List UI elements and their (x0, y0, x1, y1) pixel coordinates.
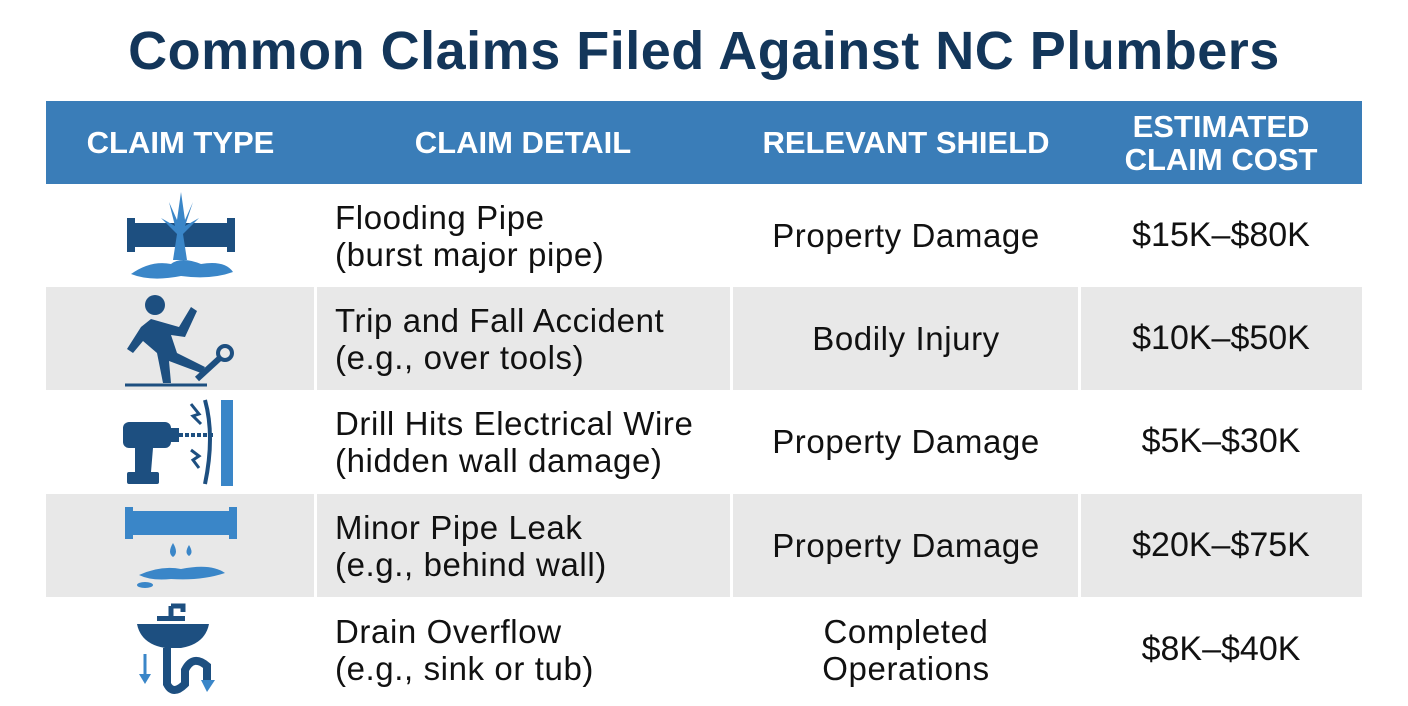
icon: burst pipe (127, 192, 235, 279)
text: leak detail: (e.g., behind wall) (335, 546, 607, 582)
row: flooding pipe (127, 192, 1310, 279)
text: shield: Property Damage (772, 217, 1040, 254)
text: drill detail (335, 404, 693, 479)
header: claim detail: CLAIM DETAIL (415, 125, 631, 160)
icon: leaking pipe (125, 507, 237, 588)
text: cost: $5K–$30K (1142, 422, 1300, 460)
text: cost: $15K–$80K (1132, 216, 1310, 254)
text: trip detail (335, 302, 664, 376)
text: shield: Bodily Injury (812, 320, 1000, 357)
text: leak detail (335, 508, 607, 583)
header: estimated cost: CLAIM COST (1125, 142, 1317, 176)
text: drain detail: Drain Overflow (335, 612, 562, 650)
text: shield: Property Damage (772, 527, 1040, 564)
text: drill detail: Drill Hits Electrical Wire (335, 404, 693, 442)
text: cost: $8K–$40K (1142, 630, 1300, 668)
icon: falling person (125, 295, 234, 386)
row: minor leak (46, 494, 1362, 597)
header: estimated cost: ESTIMATED (1133, 108, 1309, 144)
text: cost: $10K–$50K (1132, 319, 1310, 357)
icon: sink drain (137, 604, 215, 694)
text: shield (822, 612, 990, 687)
row: drain overflow (137, 604, 1300, 694)
row: trip and fall (46, 287, 1362, 390)
text: leak detail: Minor Pipe Leak (335, 508, 582, 546)
text: trip detail: Trip and Fall Accident (335, 302, 664, 338)
text: shield: Property Damage (772, 423, 1040, 460)
icon: drill (123, 400, 233, 486)
text: drain detail: (e.g., sink or tub) (335, 650, 594, 686)
text: shield: Operations (822, 650, 990, 686)
text: drain detail (335, 612, 594, 687)
text: trip detail: (e.g., over tools) (335, 338, 584, 376)
title: Common Claims Filed Against NC Plumbers (128, 21, 1280, 81)
header bar (46, 101, 1362, 184)
text: flooding pipe detail (335, 198, 604, 273)
header: relevant shield: RELEVANT SHIELD (762, 125, 1050, 160)
text: cost: $20K–$75K (1132, 526, 1310, 564)
header: claim type: CLAIM TYPE (87, 125, 274, 160)
text: drill detail: (hidden wall damage) (335, 442, 663, 478)
text: flooding pipe detail: Flooding Pipe (335, 198, 545, 236)
text: flooding pipe detail: (burst major pipe) (335, 236, 604, 272)
text: shield: Completed (824, 612, 988, 650)
header: estimated cost (1125, 108, 1318, 176)
row: drill wire (123, 400, 1300, 486)
